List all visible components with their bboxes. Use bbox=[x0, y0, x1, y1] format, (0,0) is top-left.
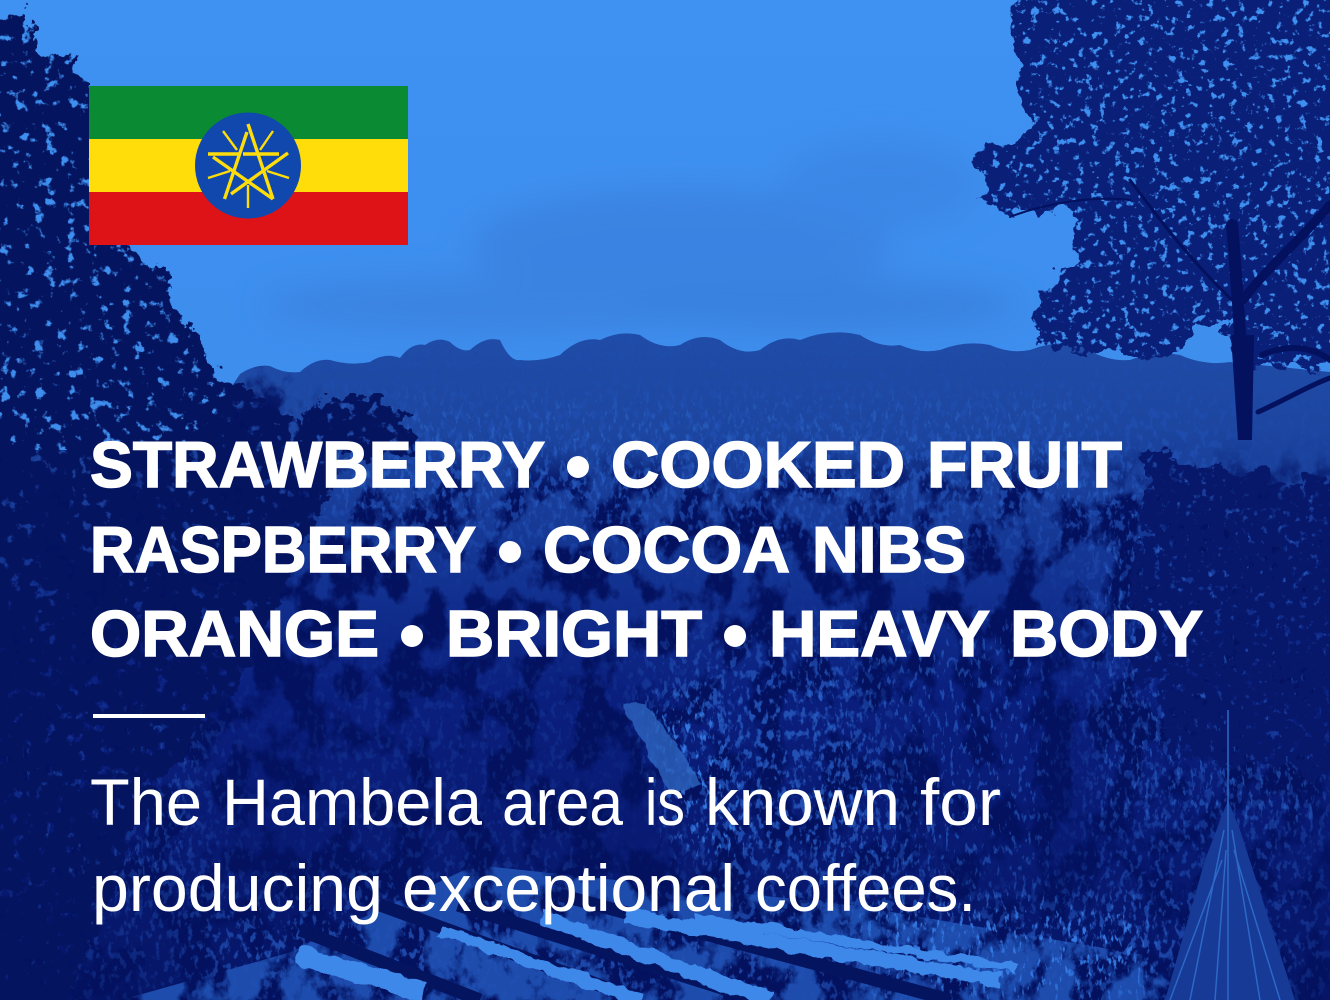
heading line 1: STRAWBERRY bbox=[90, 428, 545, 501]
heading line 3: HEAVY bbox=[769, 597, 990, 670]
red stripe bbox=[89, 192, 408, 245]
description line 1: known bbox=[705, 765, 900, 839]
pentagram star with rays bbox=[208, 124, 289, 208]
description line 1: The bbox=[90, 765, 202, 839]
green stripe bbox=[89, 86, 408, 139]
heading line 3: BODY bbox=[1010, 597, 1203, 670]
flag of Ethiopia bbox=[89, 86, 408, 245]
forest land with textured foliage bbox=[0, 330, 1330, 1000]
nearby shrubs bbox=[300, 398, 420, 460]
bright planks bbox=[297, 917, 1017, 1000]
heading line 1: FRUIT bbox=[927, 428, 1122, 501]
thatched bundle bbox=[1165, 710, 1295, 1000]
heading line 3: ORANGE bbox=[90, 597, 379, 670]
description line 2: exceptional bbox=[402, 851, 735, 925]
heading line 2 bbox=[90, 513, 966, 586]
mid-blue foliage speckle bbox=[0, 417, 1330, 1000]
description line 1: area bbox=[502, 765, 623, 839]
description line 1: for bbox=[920, 765, 1001, 839]
yellow stripe bbox=[89, 139, 408, 192]
heading line 1 bbox=[90, 428, 1122, 501]
dirt path bbox=[622, 702, 702, 795]
bright foliage speckle bbox=[0, 330, 1330, 1000]
heading line 3: BRIGHT bbox=[446, 597, 702, 670]
heading line 1: COOKED bbox=[611, 428, 905, 501]
dark shadow gaps between planks bbox=[300, 895, 950, 1000]
description text bbox=[90, 765, 1001, 925]
heading line 2: RASPBERRY bbox=[90, 513, 476, 586]
left tree bbox=[0, 12, 340, 1000]
right tree canopy bbox=[975, 0, 1330, 370]
blue disc bbox=[195, 112, 301, 218]
right side dark shrubs bbox=[1130, 450, 1330, 780]
right tree branches and trunk bbox=[1010, 180, 1330, 412]
tasting notes heading bbox=[90, 428, 1203, 670]
ground in front of planks bbox=[85, 865, 1190, 1000]
description line 2 bbox=[92, 851, 976, 925]
description line 1: is bbox=[645, 765, 685, 839]
description line 1: Hambela bbox=[222, 765, 482, 839]
description line 2: coffees. bbox=[755, 851, 976, 925]
dark foliage blotches bbox=[0, 330, 1330, 1000]
heading line 3 bbox=[90, 597, 1203, 670]
clouds bbox=[260, 140, 1020, 333]
description line 2: producing bbox=[92, 851, 383, 925]
land base bbox=[0, 330, 1330, 1000]
divider rule bbox=[93, 714, 205, 718]
heading line 2: COCOA bbox=[543, 513, 790, 586]
right tree lower trunk bbox=[1231, 335, 1254, 440]
description line 1 bbox=[90, 765, 1001, 839]
heading line 2: NIBS bbox=[812, 513, 966, 586]
dark speckle on the far treeline bbox=[240, 378, 1330, 485]
